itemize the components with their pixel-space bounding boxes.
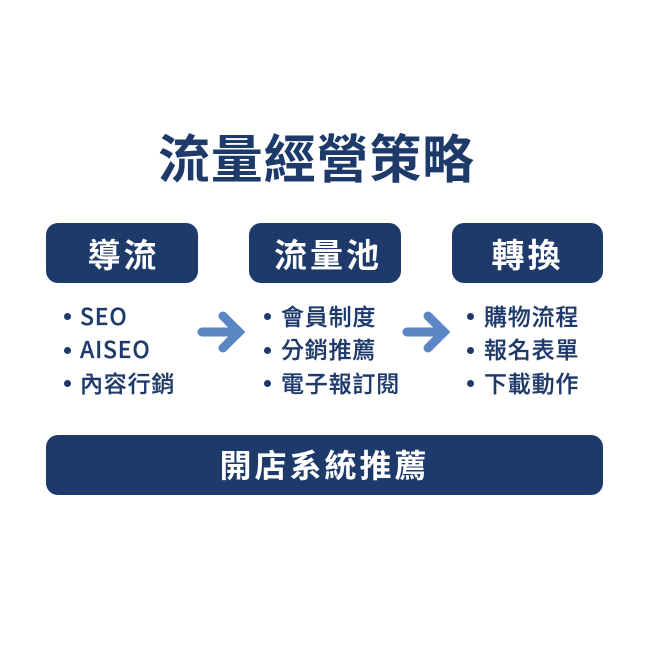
list: 導流 items: AISEO xyxy=(80,331,151,365)
heading box: 導流 xyxy=(46,223,198,283)
list: 轉換 items: 下載動作 xyxy=(484,365,579,399)
title: 流量經營策略 xyxy=(158,118,475,193)
heading box: 導流: 導流 xyxy=(88,229,160,277)
heading box: 流量池: 流量池 xyxy=(274,229,382,277)
heading box: 轉換 xyxy=(452,223,603,283)
list: 流量池 items: 電子報訂閱 xyxy=(281,365,400,399)
arrow: 導流 to 流量池 xyxy=(198,312,246,352)
list: 導流 items: 內容行銷 xyxy=(80,365,175,399)
bottom banner: 開店系統推薦 xyxy=(46,435,603,495)
list: 轉換 items: 購物流程 xyxy=(484,298,579,332)
arrow: 流量池 to 轉換 xyxy=(402,312,450,352)
list: 轉換 items xyxy=(467,298,579,399)
heading box: 轉換: 轉換 xyxy=(492,229,564,277)
list: 流量池 items xyxy=(264,298,400,399)
list: 導流 items: SEO xyxy=(80,298,128,332)
bottom banner: 開店系統推薦: 開店系統推薦 xyxy=(219,441,430,487)
heading box: 流量池 xyxy=(249,223,401,283)
list: 流量池 items: 會員制度 xyxy=(281,298,376,332)
list: 流量池 items: 分銷推薦 xyxy=(281,331,376,365)
list: 轉換 items: 報名表單 xyxy=(484,331,579,365)
list: 導流 items xyxy=(64,298,175,399)
